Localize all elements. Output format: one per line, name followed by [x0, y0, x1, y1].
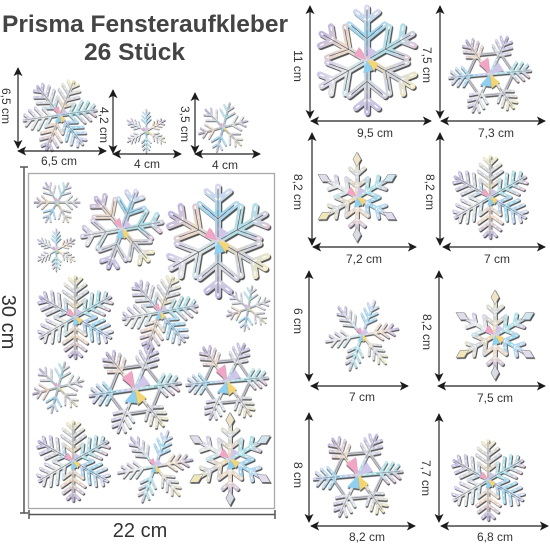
panel: sticker sheet	[26, 171, 281, 514]
snowflake 8,2 x 8 cm with dimensions: 8,2 cm	[349, 530, 385, 544]
snowflake 8,2 x 8 cm with dimensions: 8 cm	[291, 462, 305, 488]
snowflake 7 x 8,2 cm with dimensions: 7 cm	[484, 252, 510, 266]
small snowflake 4 x 3,5 cm with dimensions: 3,5 cm	[178, 106, 192, 142]
sheet snowflakes	[26, 171, 281, 514]
small snowflake 6,5 x 6,5 cm with dimensions	[0, 67, 108, 168]
snowflake 7,3 x 7,5 cm with dimensions	[420, 6, 545, 140]
snowflake 6,8 x 7,7 cm with dimensions: 7,7 cm	[419, 460, 433, 496]
snowflake 7 x 6 cm with dimensions	[291, 271, 408, 404]
title: Prisma Fensteraufkleber	[2, 11, 288, 38]
title: 26 Stück	[84, 39, 186, 66]
snowflake 7,2 x 8,2 cm with dimensions	[291, 133, 416, 266]
snowflake 7,3 x 7,5 cm with dimensions: 7,3 cm	[478, 126, 514, 140]
small snowflake 6,5 x 6,5 cm with dimensions: 6,5 cm	[41, 154, 77, 168]
small snowflake 4 x 3,5 cm with dimensions: 4 cm	[212, 158, 238, 172]
snowflake 9,5 x 11 cm with dimensions: 9,5 cm	[357, 126, 393, 140]
snowflake 7,5 x 8,2 cm with dimensions: 7,5 cm	[477, 391, 513, 405]
snowflake 7,3 x 7,5 cm with dimensions: 7,5 cm	[420, 47, 434, 83]
snowflake 7,5 x 8,2 cm with dimensions: 8,2 cm	[420, 314, 434, 350]
snowflake 7,2 x 8,2 cm with dimensions: 8,2 cm	[291, 174, 305, 210]
snowflake 8,2 x 8 cm with dimensions	[291, 413, 416, 544]
snowflake 7,2 x 8,2 cm with dimensions: 7,2 cm	[346, 252, 382, 266]
snowflake 6,8 x 7,7 cm with dimensions	[419, 414, 548, 544]
snowflake 9,5 x 11 cm with dimensions: 11 cm	[291, 50, 305, 82]
title	[2, 11, 288, 66]
snowflake 7 x 6 cm with dimensions: 7 cm	[349, 390, 375, 404]
snowflake 7 x 8,2 cm with dimensions	[423, 133, 545, 266]
sheet height dimension	[0, 167, 28, 513]
small snowflake 4 x 4,2 cm with dimensions: 4,2 cm	[97, 107, 111, 143]
small snowflake 4 x 3,5 cm with dimensions	[178, 93, 260, 172]
snowflake 7 x 8,2 cm with dimensions: 8,2 cm	[423, 174, 437, 210]
sheet width dimension	[29, 510, 275, 542]
sheet width dimension: 22 cm	[113, 520, 167, 542]
snowflake 7,5 x 8,2 cm with dimensions	[420, 271, 545, 405]
snowflake 7 x 6 cm with dimensions: 6 cm	[291, 308, 305, 334]
snowflake 6,8 x 7,7 cm with dimensions: 6,8 cm	[477, 530, 513, 544]
small snowflake 4 x 4,2 cm with dimensions	[97, 90, 181, 171]
small snowflake 4 x 4,2 cm with dimensions: 4 cm	[134, 157, 160, 171]
snowflake 9,5 x 11 cm with dimensions	[291, 6, 431, 140]
